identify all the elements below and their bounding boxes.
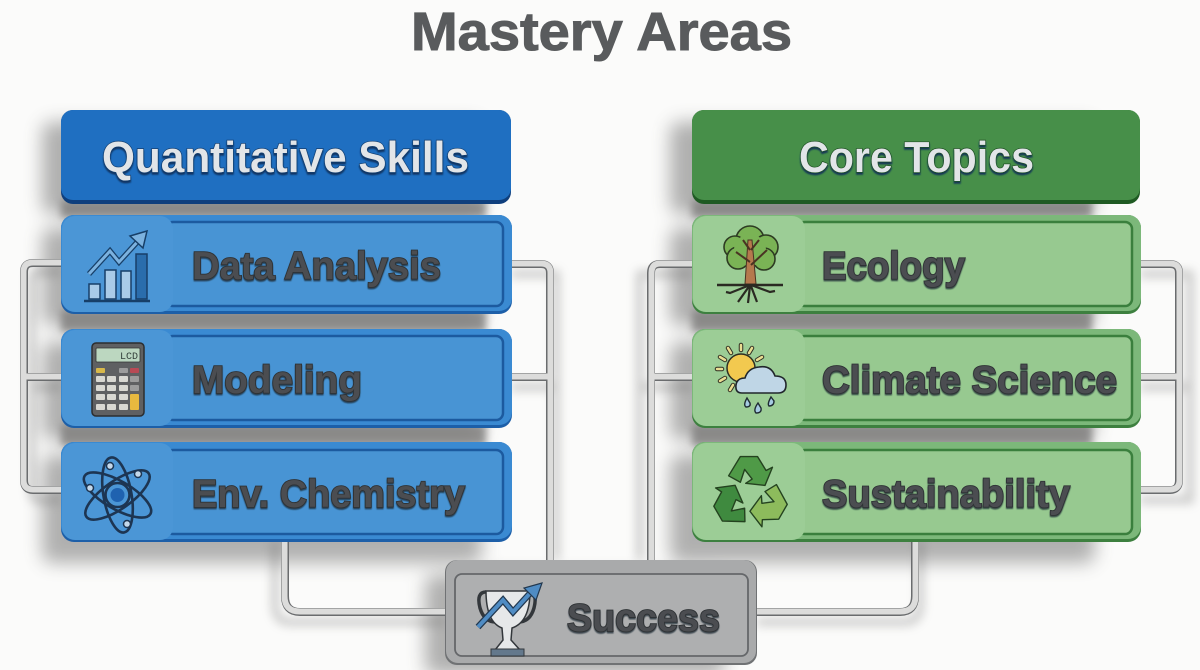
icon: tree with roots	[717, 226, 783, 303]
header: core topics	[692, 110, 1140, 204]
icon: atom	[78, 455, 157, 535]
icon: sun and rain cloud	[717, 345, 786, 413]
row: modeling	[61, 329, 512, 428]
icon: calculator: LCD	[120, 352, 138, 363]
row: ecology	[692, 215, 1141, 314]
connector: quantitative skills to success	[511, 264, 550, 562]
row: sustainability: Sustainability	[822, 473, 1070, 516]
header: core topics: Core Topics	[799, 133, 1034, 182]
connector: environmental chemistry to success	[284, 541, 446, 612]
panel: core topics	[692, 110, 1141, 542]
header: quantitative skills	[61, 110, 511, 204]
row: env. chemistry	[61, 442, 512, 542]
connector: left loop	[24, 262, 61, 490]
row: data analysis	[61, 215, 512, 314]
panel: success: Success	[567, 597, 720, 640]
icon: trophy with rising arrow	[478, 583, 542, 656]
row: ecology: Ecology	[822, 245, 965, 288]
panel: success	[445, 560, 757, 665]
icon: calculator	[92, 343, 144, 416]
row: climate science: Climate Science	[822, 359, 1117, 402]
connector: core topics to success	[651, 264, 692, 562]
icon: recycling arrows	[706, 457, 793, 532]
row: data analysis: Data Analysis	[192, 245, 441, 288]
connector: right loop	[1140, 264, 1180, 490]
row: modeling: Modeling	[192, 359, 362, 402]
drop shadows	[42, 122, 1095, 670]
panel: quantitative skills	[61, 110, 512, 542]
row: env. chemistry: Env. Chemistry	[192, 473, 465, 516]
connector shadows	[32, 272, 1190, 622]
title: Mastery Areas	[411, 2, 792, 62]
row: climate science	[692, 329, 1141, 428]
icon: chart with rising arrow	[84, 231, 150, 301]
connector: sustainability to success	[757, 541, 916, 612]
row: sustainability	[692, 442, 1141, 542]
gap shadows between rows	[61, 200, 1092, 446]
header: quantitative skills: Quantitative Skills	[102, 133, 469, 182]
